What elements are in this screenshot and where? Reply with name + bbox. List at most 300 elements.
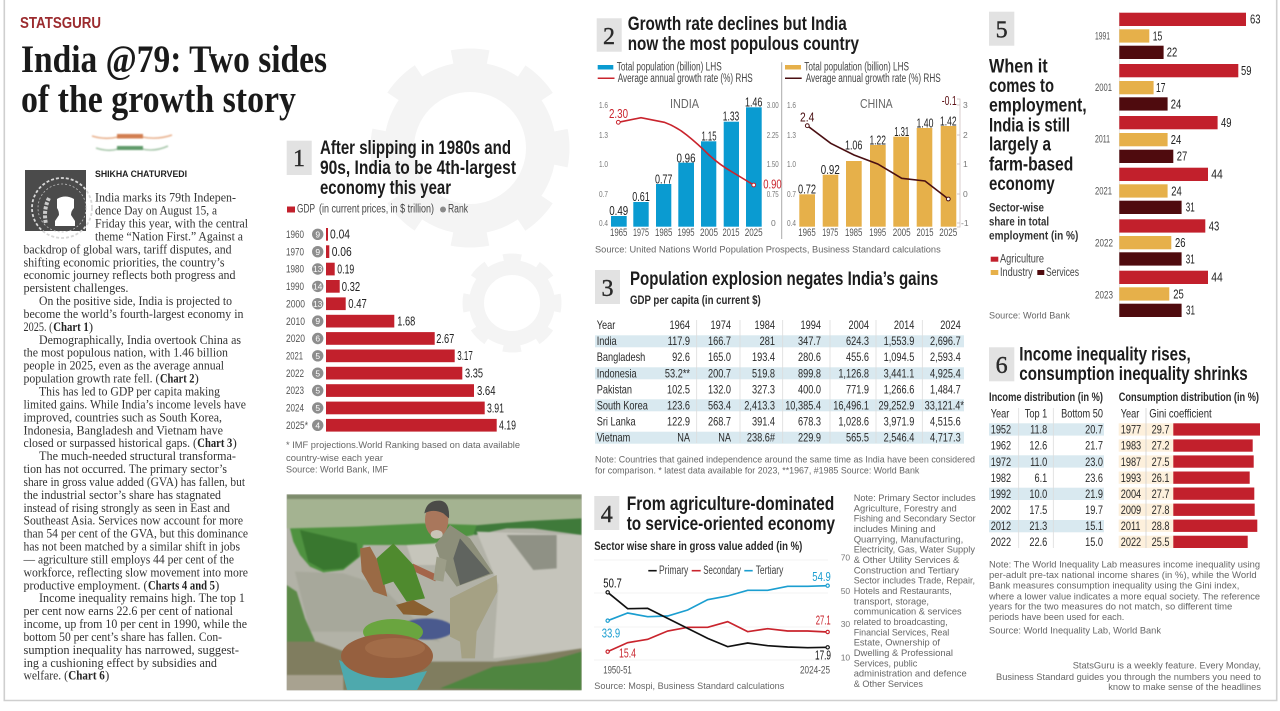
bar chart: GDP by year: 5 [315, 351, 320, 361]
bar chart: GDP by year: 13 [313, 299, 323, 309]
article text: — agriculture still employs 44 per cent of the [23, 552, 234, 566]
table: GDP per capita by country: 565.5 [846, 433, 869, 445]
bar chart: GDP by year: 2.67 [436, 332, 454, 346]
table: GDP per capita by country: Year [597, 320, 616, 332]
heading: chart 2: Growth rate declines but India [628, 14, 847, 35]
table and bars: consumption Gini: 28.8 [1152, 521, 1170, 533]
combo chart: India: 0.7 [599, 189, 608, 199]
table and bars: consumption Gini: 2009 [1121, 505, 1141, 517]
number badge 1: 1 [293, 146, 305, 172]
bar chart: employment share by year: 2023 [1095, 289, 1113, 301]
table: GDP per capita by country: 400.0 [798, 385, 821, 397]
table: GDP per capita by country: 1994 [801, 320, 821, 332]
article text: productive employment. ( [24, 577, 148, 592]
table: GDP per capita by country: 2,413.3 [744, 401, 775, 413]
table: income distribution: 1982 [991, 473, 1011, 485]
legend: GDP and rank: Rank [448, 204, 468, 216]
table: income distribution: 1972 [991, 457, 1011, 469]
note: sector definitions: Note: Primary Sector includes [854, 493, 976, 504]
bar chart: GDP by year: 1980 [286, 264, 304, 276]
number badge 4: 4 [601, 502, 613, 528]
note: sector definitions: includes Mining and [854, 524, 936, 535]
source: chart 2: Source: United Nations World Population Prospects, Business Standard calculations [595, 244, 941, 255]
bar chart: employment share by year: 24 [1171, 184, 1182, 198]
table: income distribution: Year [991, 408, 1010, 421]
table: GDP per capita by country: 53.2** [665, 368, 690, 381]
combo chart: India: 1.3 [599, 130, 608, 140]
bar chart: employment share by year: 24 [1171, 133, 1181, 147]
legend: China [785, 62, 941, 85]
line chart: primary, secondary, tertiary: 54.9 [812, 569, 831, 584]
combo chart: China: 1 [963, 159, 968, 169]
table: income distribution: 22.6 [1029, 537, 1047, 549]
legend: employment sectors: Agriculture [1000, 253, 1044, 265]
heading: chart 1: economy this year [320, 178, 451, 199]
main title [21, 38, 327, 121]
table: GDP per capita by country: 117.9 [668, 336, 690, 348]
note: sector definitions: & Other Utility Services & [854, 555, 960, 566]
note: inequality measures: where a lower value indicates a more equal society. The reference [988, 591, 1260, 602]
bar chart: GDP by year: 2024 [286, 403, 304, 415]
bar chart: employment share by year: 17 [1156, 81, 1166, 95]
table: GDP per capita by country: 624.3 [846, 336, 869, 348]
subheading: chart 5: Sector-wise [989, 201, 1044, 215]
bar chart: GDP by year: 0.47 [348, 297, 367, 311]
panel: chart 4 sector share of GVA [594, 493, 976, 692]
bar chart: GDP by year: 9 [315, 316, 320, 326]
heading: chart 3: Population explosion negates India’s gains [630, 269, 938, 290]
icon: emblem portrait [25, 170, 92, 238]
line chart: primary, secondary, tertiary: 17.9 [815, 647, 831, 662]
bar chart: employment share by year: 31 [1186, 304, 1195, 318]
footer: StatsGuru note: Business Standard guides you through the numbers you need to [996, 672, 1261, 683]
combo chart: India: 0.61 [632, 189, 650, 204]
combo chart: China: 2015 [916, 227, 934, 239]
table and bars: consumption Gini: 1987 [1121, 457, 1141, 469]
table and bars: consumption Gini [1119, 408, 1260, 549]
bar chart: employment share by year [1095, 12, 1261, 318]
article text: Chart 2 [160, 371, 194, 386]
table: GDP per capita by country: Bangladesh [597, 352, 645, 365]
combo chart: India: 0.75 [767, 189, 779, 199]
note: sector definitions: Quarrying, Manufacturing, [854, 534, 963, 545]
table: GDP per capita by country: 122.9 [667, 417, 690, 429]
bar chart: GDP by year: 0.19 [337, 262, 354, 276]
table: GDP per capita by country: 4,515.6 [930, 417, 961, 429]
table: income distribution: 1962 [991, 441, 1011, 453]
note: sector definitions: Financial Services, Real [854, 627, 949, 638]
table: income distribution: 21.3 [1029, 521, 1047, 533]
icon: tricolour flag ornament [92, 134, 172, 150]
note: inequality measures: Source: World Inequality Lab, World Bank [989, 625, 1161, 636]
note: sector definitions: Hotels and Restaurants, [854, 586, 952, 597]
article text: Southeast Asia. Services now account for more [24, 513, 243, 528]
article text: The much-needed structural transforma- [39, 448, 236, 463]
heading: chart 4 [627, 494, 835, 535]
table: GDP per capita by country: 102.5 [667, 385, 690, 397]
table: GDP per capita by country: 1964 [670, 320, 690, 332]
bar chart: employment share by year: 44 [1211, 168, 1223, 182]
number badge 4 [594, 496, 619, 530]
bar chart: employment share by year: 31 [1186, 252, 1195, 266]
bar chart: employment share by year: 22 [1167, 46, 1177, 60]
number badge 5: 5 [996, 18, 1008, 44]
note: sector definitions: communication & services [854, 607, 962, 618]
article text: population growth rate fell. ( [24, 371, 160, 386]
number badge 1 [287, 141, 312, 175]
combo chart: India: 1.50 [767, 159, 779, 169]
note: inequality measures [988, 560, 1260, 636]
note: inequality measures: Note: The World Inequality Lab measures income inequality using [989, 560, 1260, 571]
number badge 6: 6 [996, 353, 1008, 379]
number badge 6 [989, 347, 1014, 381]
table and bars: consumption Gini: 1993 [1121, 473, 1141, 485]
table: GDP per capita by country: 4,717.3 [930, 433, 961, 445]
panel: chart 5 employment by sector [989, 12, 1261, 321]
table: GDP per capita by country: 519.8 [752, 368, 775, 381]
table: income distribution: 17.5 [1029, 505, 1047, 517]
article text: economic journey reflects both progress and [24, 267, 236, 282]
article text: people in 2025, even as the average annual [24, 358, 224, 373]
article text: ) [89, 319, 93, 334]
combo chart: China: 1975 [822, 227, 838, 239]
bar chart: GDP by year: 1960 [286, 229, 304, 241]
table: GDP per capita by country: 2024 [940, 320, 961, 332]
legend: China: Total population (billion) LHS [804, 62, 909, 74]
combo chart: China: 0.92 [821, 162, 840, 177]
table and bars: consumption Gini: 27.5 [1152, 457, 1170, 469]
table: income distribution: 1952 [991, 425, 1011, 437]
table: GDP per capita by country: 280.6 [798, 352, 821, 365]
table: GDP per capita by country: 899.8 [798, 368, 821, 381]
table: income distribution: 15.1 [1085, 521, 1103, 533]
combo chart: India: 0 [771, 218, 776, 228]
table: income distribution: 10.0 [1029, 489, 1047, 501]
combo chart: India: 2015 [722, 227, 740, 239]
line chart: primary, secondary, tertiary: 50 [841, 586, 850, 596]
legend: GDP and rank: (in current prices, in $ trillion) [319, 204, 434, 216]
combo chart: India [599, 95, 782, 239]
note: sector definitions: Services, public [854, 658, 918, 669]
note: sector definitions: Estate, Ownership of [854, 638, 940, 649]
main title: of the growth story [21, 78, 296, 121]
article text: shifting economic priorities, the country’s [24, 254, 224, 269]
note: sector definitions: transport, storage, [854, 596, 929, 607]
combo chart: China: 3 [963, 100, 968, 110]
table and bars: consumption Gini: 27.8 [1152, 505, 1170, 517]
heading: chart 4: From agriculture-dominated [627, 494, 834, 515]
table: GDP per capita by country: 132.0 [708, 385, 731, 397]
note: inequality measures: Bank measures consumption inequality using the Gini index, [989, 581, 1239, 592]
combo chart: India: 1.0 [599, 159, 608, 169]
table: GDP per capita by country: 2004 [849, 320, 869, 332]
line chart: primary, secondary, tertiary: 1950-51 [603, 664, 632, 676]
table: GDP per capita by country: 771.9 [846, 385, 869, 397]
heading: chart 5 [989, 56, 1087, 195]
footer: StatsGuru note [996, 660, 1261, 693]
heading: chart 6 [1019, 345, 1248, 385]
table and bars: consumption Gini: 26.1 [1152, 473, 1170, 485]
bar chart: employment share by year: 15 [1153, 29, 1162, 43]
article text: India marks its 79th Indepen- [95, 190, 236, 205]
legend: sectors [648, 565, 783, 577]
combo chart: India: 1985 [655, 227, 672, 239]
article text [23, 190, 248, 683]
table and bars: consumption Gini: Gini coefficient [1149, 408, 1212, 421]
table and bars: consumption Gini: 29.7 [1152, 425, 1170, 437]
combo chart: India: INDIA [670, 96, 699, 111]
line chart: primary, secondary, tertiary: 50.7 [603, 576, 622, 591]
table: GDP per capita by country: 1974 [711, 320, 731, 332]
table: income distribution: 20.7 [1085, 425, 1103, 437]
bar chart: GDP by year: 5 [315, 386, 320, 396]
footnote: chart 3 [595, 454, 975, 476]
footnote: chart 1: country-wise each year [286, 453, 383, 464]
article text: Indonesia, Bangladesh and Vietnam have [24, 422, 223, 437]
table: GDP per capita by country: 1,484.7 [930, 385, 961, 397]
bar chart: GDP by year: 2023 [286, 385, 304, 397]
article text: ing a cushioning effect by subsidies and [24, 655, 217, 670]
bar chart: GDP by year: 0.06 [332, 245, 352, 259]
bar chart: employment share by year: 1991 [1095, 30, 1110, 42]
bar chart: GDP by year: 13 [313, 264, 323, 274]
bar chart: GDP by year: 2010 [286, 316, 305, 328]
combo chart: India: 2.30 [609, 106, 628, 121]
panel: chart 2 population and growth rate [595, 14, 969, 255]
bar chart: employment share by year: 44 [1211, 271, 1223, 285]
table: income distribution: 21.9 [1085, 489, 1103, 501]
combo chart: China: 2005 [893, 227, 911, 239]
combo chart: India: 0.90 [763, 176, 782, 191]
footnote: chart 1 [286, 440, 520, 476]
bar chart: employment share by year: 59 [1241, 64, 1252, 78]
article text: sumption inequality has narrowed, suggest- [24, 642, 239, 657]
subheading: chart 4: Sector wise share in gross value added (in %) [594, 539, 802, 553]
number badge 3 [595, 270, 620, 304]
table and bars: consumption Gini: 1983 [1121, 441, 1141, 453]
bar chart: GDP by year: 9 [315, 229, 320, 239]
bar chart: GDP by year: 3.91 [487, 401, 504, 415]
article text: ) [232, 435, 237, 450]
bar chart: employment share by year: 49 [1221, 116, 1232, 130]
number badge 2 [597, 18, 622, 52]
article text: per cent now earns 22.6 per cent of national [24, 603, 233, 618]
table and bars: consumption Gini: 1977 [1121, 425, 1141, 437]
table: GDP per capita by country: 1,266.6 [884, 385, 914, 397]
article text: 2025. ( [24, 319, 52, 334]
combo chart: India: 1975 [633, 227, 649, 239]
article text: the most populous nation, with 1.46 billion [24, 345, 228, 360]
combo chart: China: 1.06 [845, 137, 862, 152]
bar chart: GDP by year: 3.17 [457, 349, 473, 363]
combo chart: China: 0.4 [787, 218, 796, 228]
article text: has not been matched by a similar shift in jobs [24, 538, 240, 554]
legend: employment sectors: Services [1046, 267, 1079, 279]
table: GDP per capita by country: 238.6# [747, 433, 775, 445]
subheading: chart 5: employment (in %) [989, 228, 1078, 242]
combo chart: China: 1.40 [916, 115, 934, 130]
source: chart 5: Source: World Bank [989, 310, 1070, 321]
table: GDP per capita by country: Indonesia [597, 368, 637, 381]
combo chart: India: 1.33 [723, 109, 739, 124]
table: GDP per capita by country: 33,121.4* [925, 401, 964, 413]
article text: become the world’s fourth-largest economy in [24, 306, 244, 321]
article text: dence Day on August 15, a [95, 203, 217, 218]
heading: chart 4: to service-oriented economy [627, 514, 835, 535]
heading: chart 1 [320, 138, 517, 199]
bar chart: GDP by year: 4 [315, 420, 320, 430]
table: GDP per capita by country: 2014 [894, 320, 915, 332]
table: GDP per capita by country: 92.6 [672, 352, 690, 365]
table: GDP per capita by country: NA [677, 433, 690, 445]
note: sector definitions: Electricity, Gas, Water Supply [854, 545, 975, 556]
table: GDP per capita by country: India [597, 336, 617, 348]
table: GDP per capita by country: 678.3 [798, 417, 821, 429]
article text: workforce, reflecting slow movement into more [24, 564, 248, 579]
article text: improved, countries such as South Korea, [24, 409, 222, 424]
table: GDP per capita by country: 123.6 [667, 401, 690, 413]
combo chart: China: -0.1 [942, 93, 957, 108]
bar chart: GDP by year: 9 [315, 247, 320, 257]
bar chart: employment share by year: 2021 [1095, 186, 1112, 198]
main title: India @79: Two sides [21, 38, 327, 81]
table: GDP per capita by country: 165.0 [708, 352, 731, 365]
article text: welfare. ( [24, 668, 68, 683]
bar chart: GDP by year: 3.35 [465, 367, 483, 381]
table: GDP per capita by country: Sri Lanka [597, 417, 636, 429]
combo chart: China: 1.0 [787, 159, 796, 169]
legend: GDP and rank: GDP [297, 204, 315, 216]
photo: farmer transplanting rice seedlings [287, 494, 582, 690]
bar chart: GDP by year: 3.64 [477, 384, 496, 398]
table: GDP per capita by country: 1,126.8 [838, 368, 869, 381]
article text: Income inequality remains high. The top 1 [39, 590, 245, 605]
table: GDP per capita by country: 29,252.9 [879, 401, 915, 413]
table: GDP per capita by country: 4,925.4 [930, 368, 961, 381]
combo chart: China: 1.22 [869, 133, 886, 148]
table: income distribution: Top 1 [1025, 408, 1047, 421]
combo chart: India: 0.49 [609, 203, 628, 218]
note: sector definitions [854, 493, 976, 690]
note: sector definitions: Construction and Tertiary [854, 565, 959, 576]
source: chart 4: Source: Mospi, Business Standard calculations [594, 681, 785, 692]
combo chart: China: 0.72 [798, 181, 816, 196]
heading: chart 5: largely a [989, 135, 1051, 156]
bar chart: employment share by year: 2001 [1095, 82, 1112, 94]
bar chart: employment share by year: 27 [1177, 150, 1187, 164]
heading: chart 5: employment, [989, 96, 1087, 117]
table: income distribution: 2012 [991, 521, 1011, 533]
table: GDP per capita by country: 347.7 [798, 336, 821, 348]
line chart: primary, secondary, tertiary [594, 553, 850, 676]
table and bars: consumption Gini: 2022 [1121, 537, 1141, 549]
table: GDP per capita by country: 1984 [755, 320, 775, 332]
bar chart: employment share by year: 2011 [1095, 134, 1110, 146]
table: GDP per capita by country: 3,971.9 [884, 417, 914, 429]
article text: This has led to GDP per capita making [39, 384, 220, 398]
note: sector definitions: related to broadcasting, [854, 617, 948, 628]
table: GDP per capita by country: 327.3 [752, 385, 775, 397]
number badge 2: 2 [603, 24, 615, 50]
article text: income, up from 10 per cent in 1990, while the [24, 616, 247, 631]
table and bars: consumption Gini: 2011 [1121, 521, 1141, 533]
panel: chart 1 GDP and rank [286, 138, 520, 476]
table and bars: consumption Gini: 25.5 [1152, 537, 1170, 549]
table: GDP per capita by country: 10,385.4 [785, 401, 821, 413]
combo chart: China: 1985 [845, 227, 862, 239]
note: inequality measures: per-adult pre-tax national income shares (in %), while the World [989, 570, 1257, 581]
bar chart: GDP by year: 14 [313, 282, 323, 292]
table: income distribution: Bottom 50 [1061, 408, 1103, 421]
combo chart: China: CHINA [860, 96, 893, 111]
heading: chart 6: Income inequality rises, [1019, 345, 1191, 366]
bar chart: employment share by year: 24 [1171, 97, 1181, 111]
table: income distribution: 11.8 [1030, 425, 1047, 437]
note: sector definitions: Dwelling & Professional [854, 648, 953, 659]
table: GDP per capita by country: 391.4 [752, 417, 775, 429]
heading: chart 2 [628, 14, 859, 55]
article text: Charts 4 and 5 [148, 577, 215, 592]
combo chart: India: 0.96 [676, 150, 696, 165]
heading: chart 1: After slipping in 1980s and [320, 138, 511, 159]
footnote: chart 1: Source: World Bank, IMF [286, 465, 388, 476]
article text: Chart 1 [53, 319, 89, 334]
bar chart: GDP by year: 2020 [286, 333, 305, 345]
line chart: primary, secondary, tertiary: 30 [841, 619, 850, 629]
bar chart: GDP by year: 2000 [286, 298, 305, 310]
table: GDP per capita by country: 2,546.4 [884, 433, 914, 445]
combo chart: China: 1.31 [894, 124, 909, 139]
footer: StatsGuru note: know to make sense of the headlines [1108, 682, 1261, 693]
line chart: primary, secondary, tertiary: 2024-25 [800, 664, 830, 676]
combo chart: India: 2005 [700, 227, 718, 239]
article text: bottom 50 per cent’s share has fallen. Con- [24, 629, 222, 644]
combo chart: China: 1995 [869, 227, 886, 239]
combo chart: China: 0.7 [787, 189, 796, 199]
combo chart: China: 2 [963, 130, 968, 140]
byline: SHIKHA CHATURVEDI [95, 169, 187, 180]
note: sector definitions: Agriculture, Forestry and [854, 503, 957, 514]
article text: ) [105, 668, 109, 683]
combo chart: China: -1 [961, 218, 969, 228]
legend: employment sectors: Industry [1000, 267, 1033, 279]
bar chart: GDP by year: 1.68 [397, 314, 415, 328]
heading: chart 5: comes to [989, 76, 1054, 97]
table: income distribution: 23.6 [1085, 473, 1103, 485]
number badge 3: 3 [602, 276, 614, 302]
table: GDP per capita by country: 166.7 [708, 336, 731, 348]
heading: chart 5: farm-based [989, 154, 1073, 175]
heading: chart 2: now the most populous country [628, 34, 859, 55]
combo chart: India: 2.25 [767, 130, 779, 140]
article text: theme “Nation First.” Against a [95, 228, 243, 244]
table: income distribution: 12.6 [1029, 441, 1047, 453]
legend: India: Total population (billion) LHS [617, 62, 722, 74]
table: GDP per capita by country: 200.7 [708, 368, 731, 381]
bar chart: employment share by year: 63 [1250, 13, 1261, 27]
table: GDP per capita by country: 193.4 [752, 352, 775, 365]
combo chart: India: 0.4 [599, 218, 608, 228]
article text: Demographically, India overtook China as [39, 332, 241, 347]
table and bars: consumption Gini: 27.7 [1152, 489, 1170, 501]
table: income distribution: 15.0 [1085, 537, 1103, 549]
table: GDP per capita by country: 3,441.1 [884, 368, 914, 381]
table: GDP per capita by country: 229.9 [798, 433, 821, 445]
article text: than 54 per cent of the GVA, but this dominance [24, 526, 248, 541]
article text: persistent challenges. [24, 280, 128, 295]
article text: Friday this year, with the central [95, 216, 248, 230]
note: sector definitions: & Other Services [854, 679, 923, 690]
